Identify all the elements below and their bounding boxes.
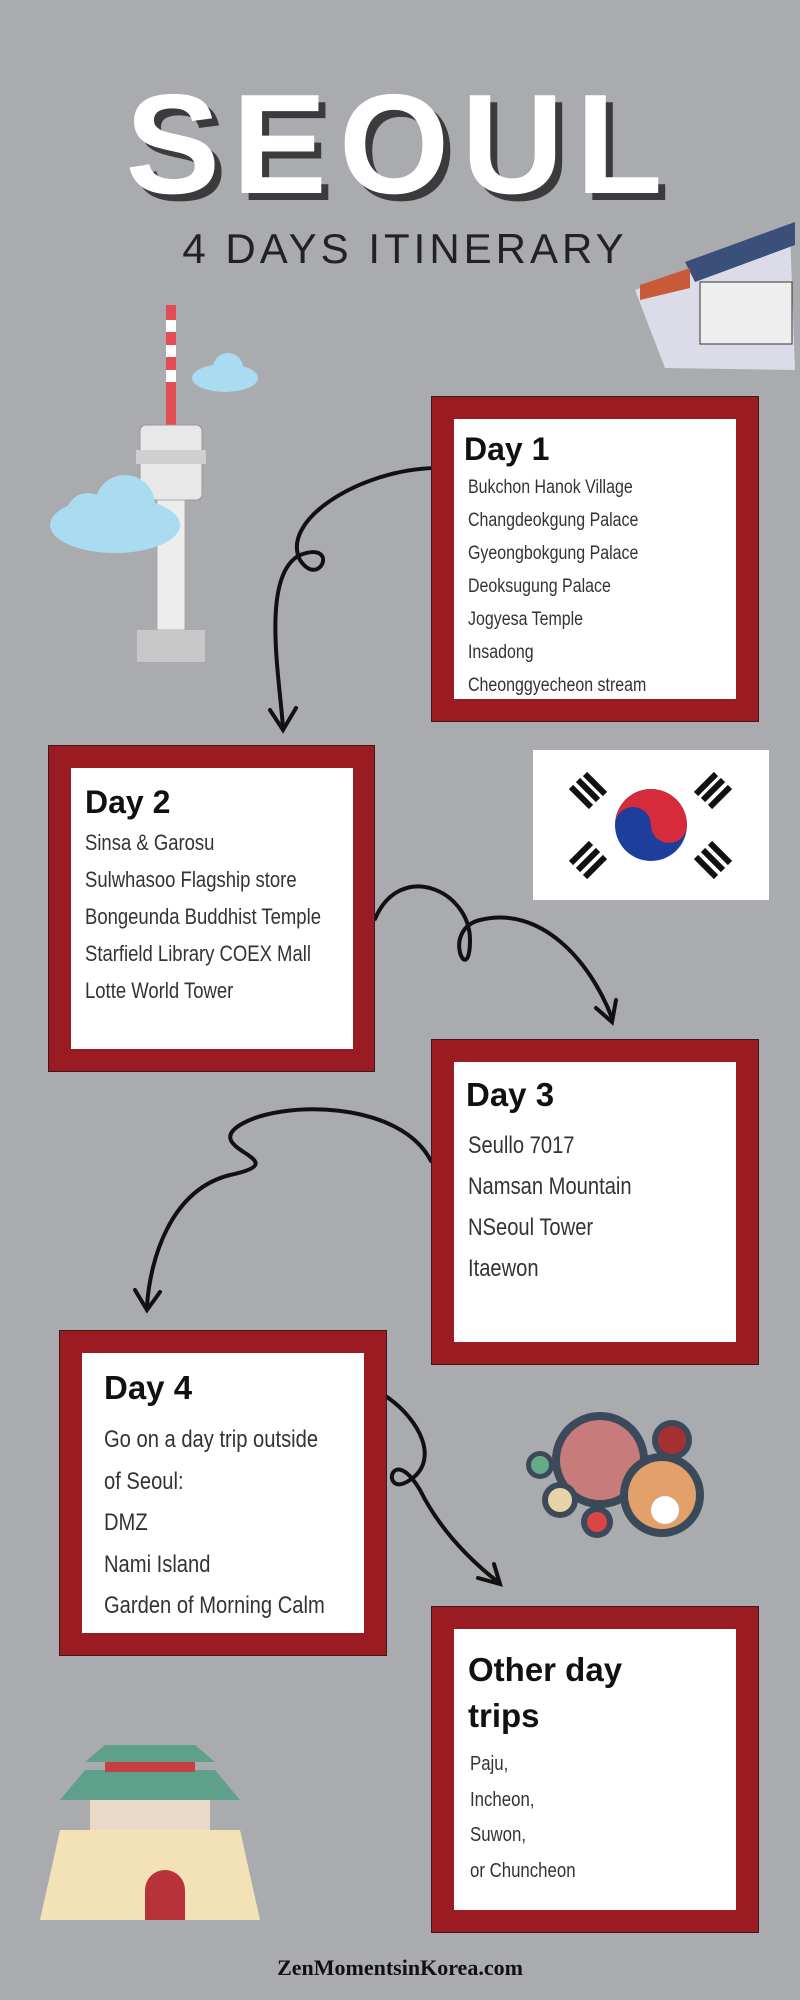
panel: other day trips: Paju, — [470, 1753, 508, 1775]
icon: clouds — [50, 353, 258, 553]
panel: day 2: Day 2 — [85, 784, 170, 820]
panel: other day trips: Incheon, — [470, 1788, 534, 1810]
panel: day 4: Go on a day trip outside — [104, 1426, 318, 1453]
panel: day 1: Deoksugung Palace — [468, 576, 611, 597]
panel: other day trips: trips — [468, 1697, 540, 1734]
panel: day 2 — [48, 745, 375, 1072]
panel: other day trips: Suwon, — [470, 1824, 526, 1846]
panel: day 1: Bukchon Hanok Village — [468, 477, 633, 498]
panel: day 3 — [431, 1039, 759, 1365]
icon: hanok street — [635, 222, 795, 370]
panel: day 4 — [59, 1330, 387, 1656]
panel: other day trips: or Chuncheon — [470, 1860, 576, 1882]
panel: day 2: Sulwhasoo Flagship store — [85, 867, 297, 892]
panel: day 4: DMZ — [104, 1509, 148, 1536]
panel: day 1: Day 1 — [464, 431, 549, 467]
arrows — [135, 468, 616, 1584]
icon: seoul tower — [136, 305, 206, 662]
panel: other day trips: Other day — [468, 1651, 622, 1688]
panel: day 4: Garden of Morning Calm — [104, 1592, 325, 1619]
panel: day 2: Sinsa & Garosu — [85, 830, 214, 855]
panel: day 1: Gyeongbokgung Palace — [468, 543, 638, 564]
panel: day 4: of Seoul: — [104, 1468, 184, 1494]
footer: ZenMomentsinKorea.com — [277, 1955, 523, 1980]
panel: day 3: Seullo 7017 — [468, 1132, 574, 1159]
icon: gate — [40, 1745, 260, 1920]
panel: day 1: Changdeokgung Palace — [468, 510, 638, 531]
panel: day 1: Cheonggyecheon stream — [468, 675, 646, 696]
panel: day 1: Jogyesa Temple — [468, 609, 583, 630]
panel: day 1 — [431, 396, 759, 722]
title: SEOUL — [125, 65, 675, 224]
panel: day 2: Lotte World Tower — [85, 978, 233, 1003]
panel: day 4: Day 4 — [104, 1369, 192, 1406]
panel: day 4: Nami Island — [104, 1550, 210, 1578]
panel: day 3: Namsan Mountain — [468, 1173, 632, 1200]
panel: day 3: Day 3 — [466, 1076, 554, 1113]
panel: day 1: Insadong — [468, 642, 534, 663]
subtitle: 4 DAYS ITINERARY — [182, 225, 628, 272]
panel: day 2: Bongeunda Buddhist Temple — [85, 904, 321, 929]
panel: day 3: Itaewon — [468, 1255, 539, 1282]
icon: korean food — [526, 1412, 704, 1538]
icon: korean flag — [533, 750, 769, 900]
panel: other day trips — [431, 1606, 759, 1933]
panel: day 3: NSeoul Tower — [468, 1214, 593, 1241]
panel: day 2: Starfield Library COEX Mall — [85, 941, 311, 966]
